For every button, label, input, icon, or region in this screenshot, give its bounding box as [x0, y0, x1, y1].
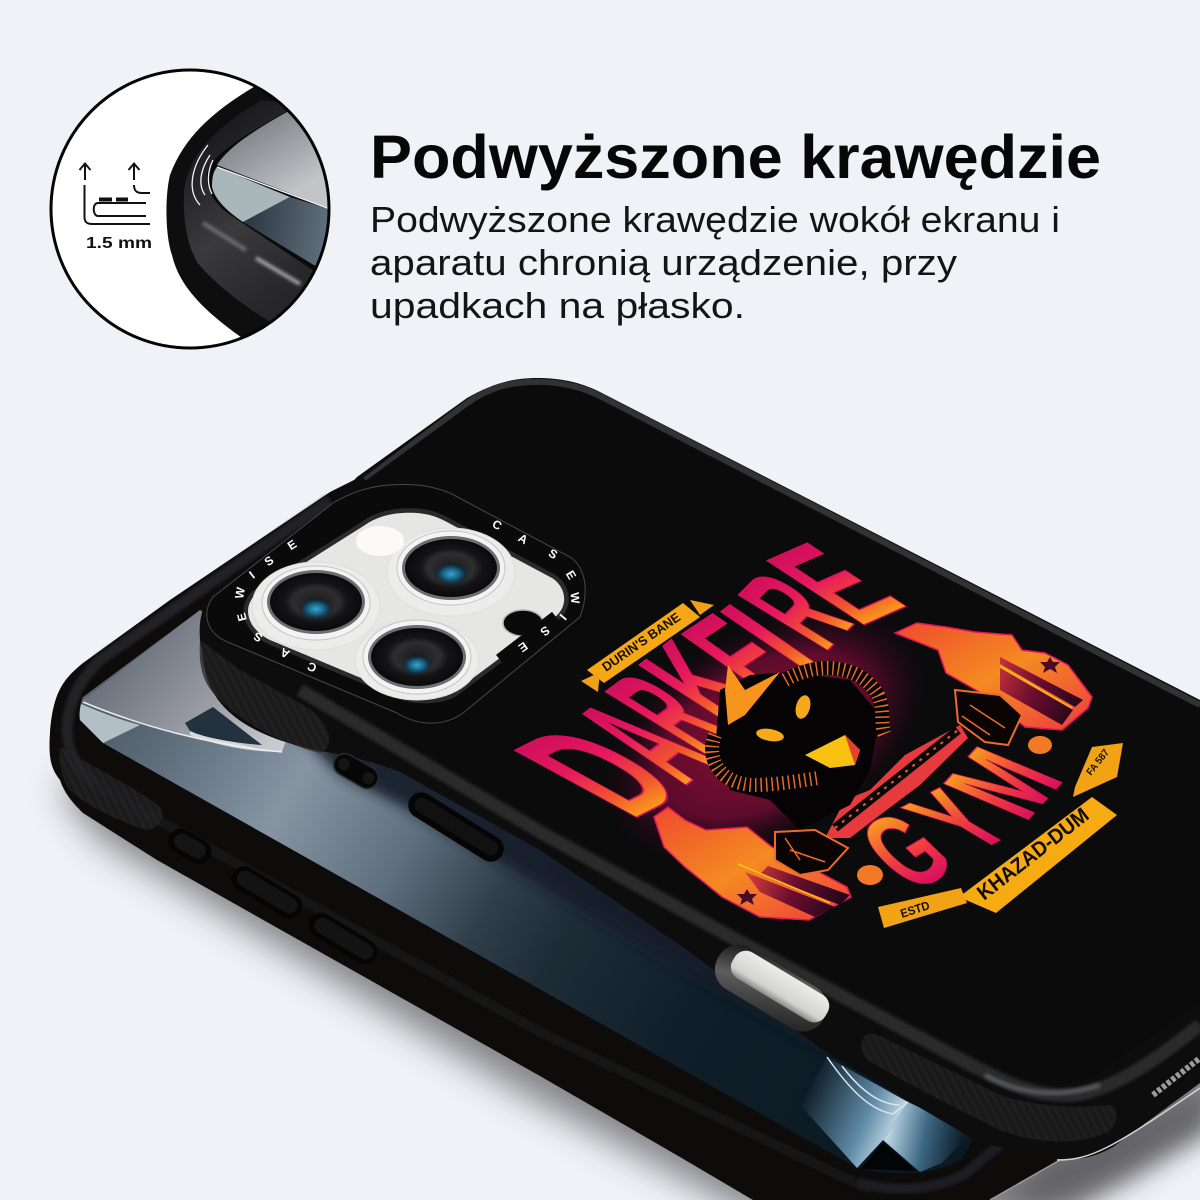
back phone button: action: [164, 824, 216, 869]
brand text on ring: S: [538, 623, 552, 639]
side button: [403, 787, 509, 867]
front phone light edge: [1057, 1088, 1200, 1160]
brand text on ring: A: [516, 531, 531, 547]
banner FA 587: FA 587: [1085, 747, 1112, 778]
description text: aparatu chronią urządzenie, przy: [370, 242, 957, 283]
case artwork: [472, 522, 1123, 928]
island inner bevel: [248, 513, 564, 699]
banner DURIN'S BANE: DURIN'S BANE: [599, 609, 683, 674]
camera island: [207, 485, 585, 723]
screen light curves: [827, 1057, 908, 1114]
banner KHAZAD-DUM: KHAZAD-DUM: [973, 804, 1093, 905]
headline GYM: G: [834, 790, 977, 911]
close-up photo of case corner: [166, 87, 328, 337]
drop shadow under phones: [60, 690, 1200, 1200]
side grill: [1153, 1058, 1200, 1095]
brand text on ring: [232, 517, 583, 675]
screen bright curve: [83, 702, 282, 752]
front phone: [200, 378, 1200, 1160]
screen grey: [217, 112, 328, 208]
skull hand left: [775, 830, 848, 875]
banner ESTD: ESTD: [899, 898, 932, 921]
headline DARKFIRE: R: [707, 550, 883, 670]
headline GYM: [834, 732, 1091, 911]
brand text on ring: I: [557, 611, 569, 623]
screen light line: [217, 167, 330, 209]
back phone: [49, 476, 1060, 1200]
brand text on ring: C: [490, 517, 505, 533]
headline DARKFIRE: F: [651, 594, 827, 716]
back phone frame: [49, 476, 1060, 1200]
case inner lip: [206, 112, 324, 270]
island raised rim: [207, 485, 585, 723]
screen pale wedge: [212, 167, 290, 222]
headline DARKFIRE: [472, 522, 940, 841]
side bump with carbon grip: [200, 640, 329, 753]
case sheen band: [184, 100, 313, 322]
brand text on ring: A: [278, 645, 292, 661]
front phone frame: [200, 378, 1200, 1160]
brand text on ring: E: [234, 611, 250, 623]
headline GYM: M: [914, 732, 1091, 834]
icon: raised lip diagram: [80, 164, 150, 224]
demon horn right: [785, 668, 885, 735]
microphone hole: [503, 610, 543, 636]
screen pale wedge: [80, 704, 140, 743]
inset circle: raised edge close-up: [51, 70, 345, 348]
camera window: [248, 513, 564, 699]
lens 2: [397, 531, 505, 605]
headline DARKFIRE: D: [472, 703, 729, 841]
front phone frame sheen: [300, 690, 1200, 1095]
description text: [370, 199, 1060, 326]
back phone bottom frame highlight: [857, 1142, 1003, 1189]
skull hand right: [955, 690, 1022, 745]
screen dark notch: [185, 707, 262, 745]
brand text on ring: W: [232, 586, 248, 600]
brand text on ring: C: [305, 659, 319, 675]
edge highlight streaks: [203, 223, 246, 250]
back phone frame sheen: [67, 500, 330, 785]
barbell plate lower left: [654, 807, 851, 920]
demon horn left: [712, 735, 818, 785]
brand text on ring: S: [262, 553, 276, 569]
screen grey wallpaper area: [83, 610, 300, 752]
banner FA 587: [1073, 743, 1123, 797]
headline DARKFIRE: I: [691, 584, 846, 691]
banner DURIN'S BANE: [581, 600, 714, 692]
title: Podwyższone krawędzie: [370, 123, 1101, 191]
screen pale curve fill: [190, 730, 282, 752]
description text: Podwyższone krawędzie wokół ekranu i: [370, 199, 1060, 240]
flame ball left: [857, 865, 883, 885]
demon eye left: [755, 727, 785, 743]
screen blue light wedge right: [883, 1102, 972, 1172]
back phone button: volume up: [227, 862, 307, 923]
front phone back surface: [215, 385, 1200, 1084]
front phone top edge strip: [365, 382, 1200, 705]
barbell plate upper right: [895, 623, 1092, 730]
brand text on ring: E: [285, 537, 299, 553]
shadow along front phone on screen: [300, 700, 900, 1060]
headline DARKFIRE: K: [610, 621, 785, 741]
corner highlight: [985, 1075, 1100, 1093]
screen black triangle: [860, 1142, 917, 1171]
star emblem: [1040, 657, 1060, 673]
brand text on ring: W: [568, 592, 583, 605]
artwork glow behind demon: [561, 557, 969, 913]
demon ear flame: [725, 665, 780, 725]
flash: [356, 526, 404, 556]
brand text on ring: S: [546, 546, 560, 562]
corner grip: [861, 1034, 1117, 1142]
back phone corner grip: [59, 747, 162, 830]
back phone screen: [80, 610, 1000, 1173]
flame ball right: [1028, 736, 1052, 754]
mute hole: [330, 749, 382, 793]
case body: [166, 87, 276, 337]
demon mouth: [805, 735, 860, 768]
lens 1: [262, 566, 370, 640]
circle outline: [51, 70, 329, 348]
brand text on ring: E: [516, 639, 530, 655]
brand text on ring: S: [251, 629, 265, 645]
headline DARKFIRE: A: [534, 679, 755, 805]
headline GYM: Y: [876, 773, 1040, 867]
measurement label: 1.5 mm: [86, 235, 152, 252]
screen blue light wedge left: [800, 1057, 908, 1168]
lens 3: [363, 620, 471, 694]
demon body: [715, 672, 880, 830]
star emblem: [737, 889, 757, 905]
headline DARKFIRE: E: [733, 522, 940, 647]
brand text on ring: I: [246, 568, 258, 582]
back phone button: volume down: [304, 908, 382, 969]
description text: upadkach na płasko.: [370, 285, 745, 326]
brand text on ring: E: [563, 568, 579, 582]
white impact arcs: [192, 145, 213, 205]
demon eye right: [793, 694, 813, 720]
shadow lower right: [1000, 1085, 1200, 1200]
charging port: [706, 936, 836, 1040]
ring overlay near hole: [500, 617, 556, 660]
back phone edge highlight: [990, 1160, 1060, 1200]
banner ESTD: [878, 888, 967, 928]
headline DARKFIRE: R: [571, 651, 766, 775]
screen dark blue: [243, 197, 328, 266]
demon: [712, 665, 885, 830]
lens housing rings: [252, 562, 380, 650]
barbell bar: [825, 725, 968, 838]
